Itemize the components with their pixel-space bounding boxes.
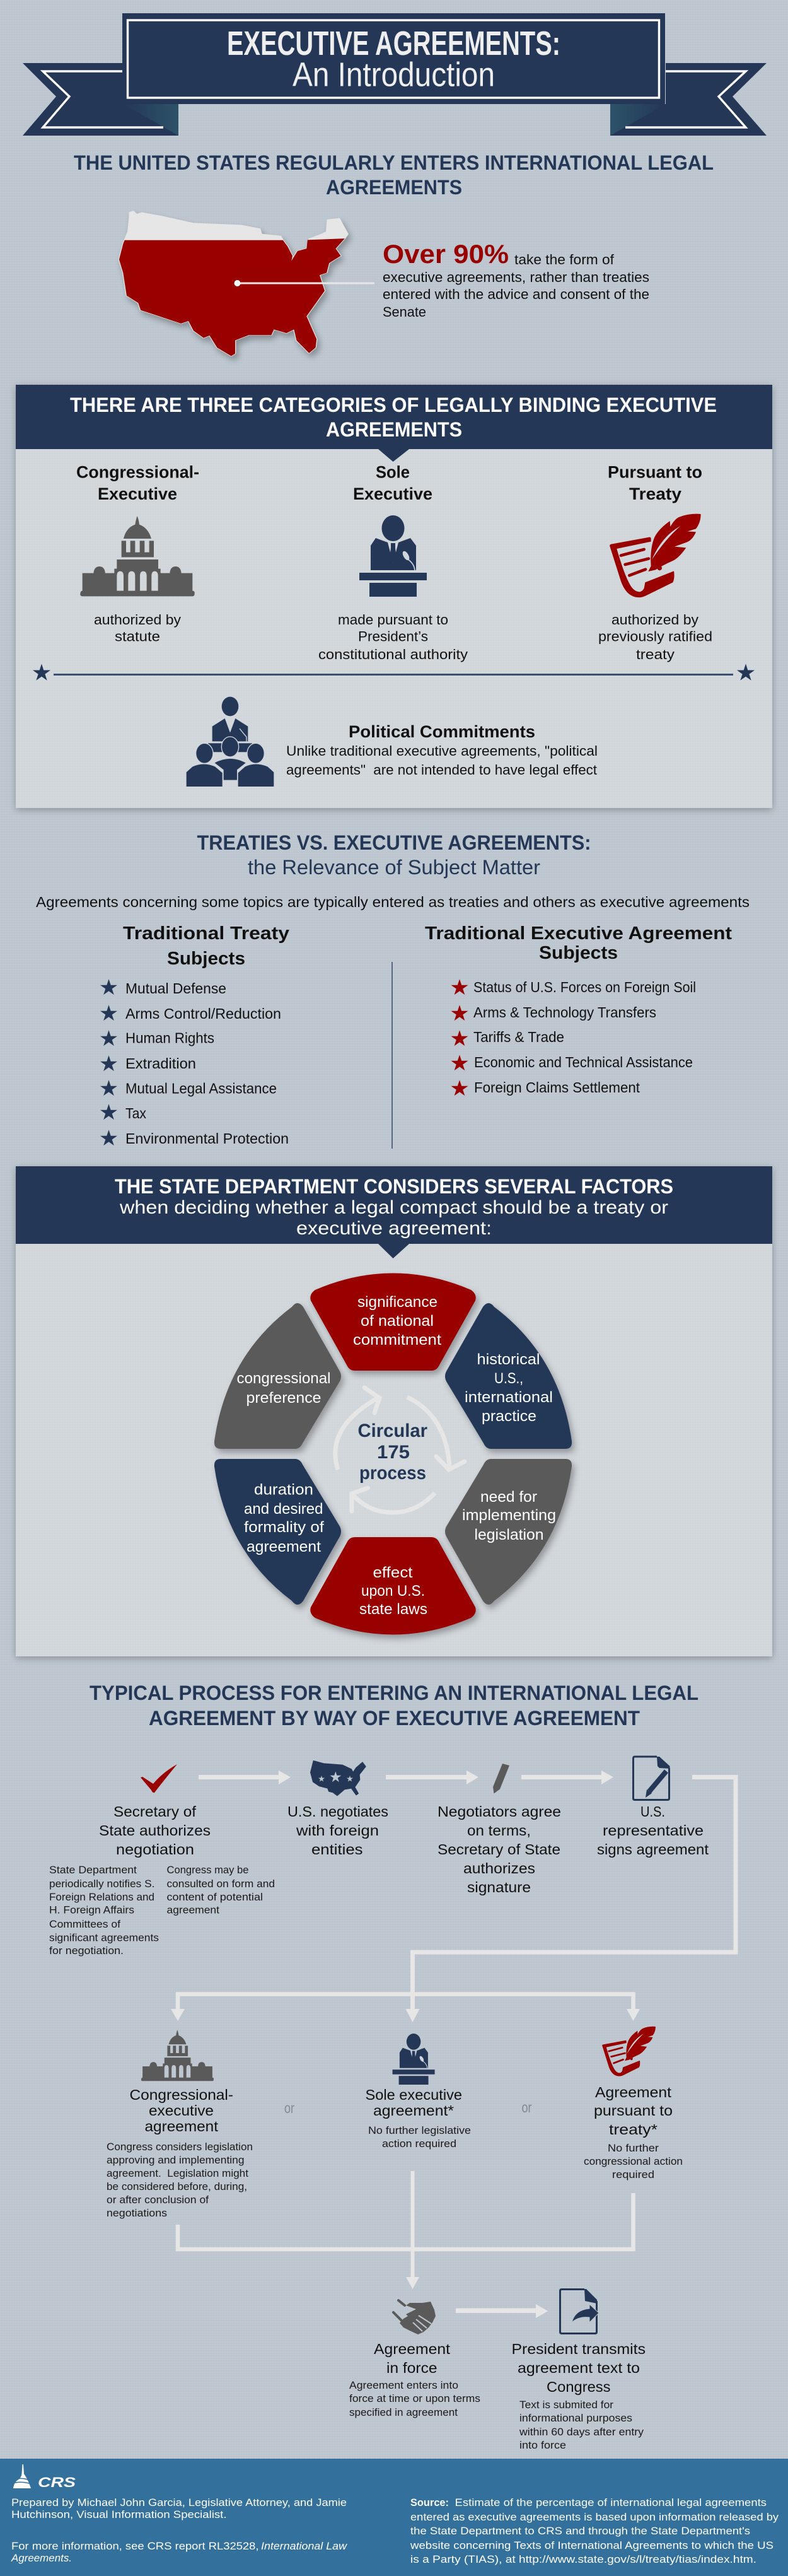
segment label: significance of national commitment (353, 1294, 441, 1349)
callout: over 90 percent: Senate (383, 304, 426, 320)
list: traditional treaty subjects: Mutual Defense (125, 980, 226, 997)
step 1: secretary of state authorizes: Congress may be (166, 1864, 248, 1876)
arrow: step 1 to step 2 (199, 1771, 291, 1784)
icon: document with forward arrow (560, 2289, 599, 2334)
US map with 90 percent fill (119, 211, 348, 356)
segment label: need for implementing legislation (462, 1489, 556, 1543)
list: traditional treaty subjects: Traditional Treaty (123, 923, 289, 944)
text: political commitments: Unlike traditional executive agreements, "political (286, 743, 598, 759)
option: sole executive agreement: Sole executive (366, 2087, 462, 2103)
center label: circular 175 process (358, 1420, 427, 1484)
segment label: effect upon U.S. state laws: effect (373, 1564, 413, 1581)
title ribbon banner (23, 13, 767, 136)
icon: US map with stars (311, 1761, 366, 1796)
option: congressional-executive agreement: approving and implementing (107, 2154, 245, 2166)
option: congressional-executive agreement: be considered before, during, (107, 2181, 247, 2193)
segment label: need for implementing legislation: need for (480, 1489, 537, 1506)
footer source note: Source: (410, 2497, 449, 2509)
category: congressional-executive: Congressional- (76, 463, 199, 482)
step 1: secretary of state authorizes: content of potential (166, 1891, 263, 1903)
panel header: three categories: THERE ARE THREE CATEGORIES OF LEGALLY BINDING EXECUTIVE (70, 394, 717, 416)
segment label: need for implementing legislation: legislation (474, 1526, 543, 1543)
list: traditional executive agreement subjects: Tariffs & Trade (473, 1029, 564, 1045)
footer credits: For more information, see CRS report RL32528, (11, 2541, 258, 2552)
step 1: secretary of state authorizes: consulted on form and (166, 1878, 275, 1890)
list: traditional executive agreement subjects: Status of U.S. Forces on Foreign Soil (473, 979, 696, 995)
heading: typical process: AGREEMENT BY WAY OF EXECUTIVE AGREEMENT (149, 1707, 640, 1730)
option: congressional-executive agreement: agreement. Legislation might (107, 2167, 248, 2179)
list: traditional treaty subjects: Tax (125, 1105, 146, 1121)
segment label: duration and formality: agreement (246, 1538, 321, 1555)
step 4: U.S. representative signs: U.S. (640, 1803, 665, 1820)
footer source note: is a Party (TIAS), at http://www.state.gov/s/l/treaty/tias/index.htm. (410, 2554, 756, 2565)
category: congressional-executive: Executive (98, 484, 177, 503)
category: sole executive: President’s (358, 628, 428, 645)
category: pursuant to treaty: previously ratified (598, 628, 712, 645)
step: agreement in force: force at time or upon terms (349, 2392, 480, 2404)
list: traditional treaty subjects: Environmental Protection (125, 1130, 289, 1147)
segment label: congressional preference (237, 1370, 330, 1407)
map leader line (235, 280, 374, 286)
footer credits: Hutchinson, Visual Information Specialist. (11, 2509, 227, 2520)
segment label: duration and formality: formality of (244, 1519, 324, 1536)
list: traditional executive agreement subjects: Economic and Technical Assistance (474, 1054, 693, 1070)
option: agreement pursuant to treaty: No further (608, 2142, 659, 2154)
step: agreement in force: Agreement (374, 2341, 451, 2357)
category: pursuant to treaty: authorized by (611, 612, 698, 628)
icon: pen (493, 1764, 509, 1794)
panel: state department factors (16, 1166, 772, 1656)
list: traditional executive agreement subjects: Subjects (539, 943, 618, 963)
panel header: three categories (16, 385, 772, 462)
panel header: state department factors: THE STATE DEPARTMENT CONSIDERS SEVERAL FACTORS (115, 1175, 673, 1198)
arrow: flow connector to three agreement types (171, 1777, 736, 2022)
segment label: historical practice (465, 1351, 553, 1425)
callout: over 90 percent: take the form of (514, 252, 615, 267)
category: pursuant to treaty: Treaty (629, 484, 681, 503)
step 1: secretary of state authorizes: for negotiation. (49, 1945, 124, 1957)
option: congressional-executive agreement: negotiations (107, 2207, 167, 2219)
option: agreement pursuant to treaty: Agreement (595, 2084, 672, 2100)
step 1: secretary of state authorizes: State authorizes (99, 1822, 211, 1839)
step: president transmits: Congress (547, 2379, 610, 2395)
option: agreement pursuant to treaty: pursuant to (594, 2102, 673, 2119)
step: president transmits: within 60 days after entry (519, 2426, 644, 2438)
option: sole executive agreement: action required (382, 2138, 456, 2150)
callout: over 90 percent: executive agreements, rather than treaties (383, 269, 649, 285)
step 4: U.S. representative signs: signs agreement (597, 1841, 709, 1858)
step: president transmits (512, 2289, 646, 2451)
title ribbon banner: An Introduction (293, 56, 495, 93)
option: congressional-executive agreement: Congress considers legislation (107, 2141, 253, 2153)
segment label: historical practice: U.S., (494, 1370, 523, 1387)
step 2: U.S. negotiates: U.S. negotiates (287, 1803, 388, 1820)
heading: united states regularly enters: AGREEMENTS (326, 176, 462, 199)
list: traditional treaty subjects: Subjects (167, 949, 245, 969)
step 2: U.S. negotiates (287, 1761, 388, 1858)
category: sole executive: made pursuant to (338, 612, 448, 628)
step 1: secretary of state authorizes: periodically notifies S. (49, 1878, 155, 1890)
step: agreement in force (349, 2300, 480, 2418)
intro sentence: Agreements concerning some topics are typically entered as treaties and others as executive agreements (36, 894, 750, 910)
list: traditional executive agreement subjects (425, 923, 732, 1096)
category: congressional-executive: authorized by (94, 612, 181, 628)
callout: over 90 percent (383, 239, 649, 320)
icon: political commitments group (186, 697, 274, 787)
segment label: effect upon U.S. state laws: state laws (359, 1601, 427, 1618)
segment label: duration and formality: duration (254, 1481, 313, 1499)
option: sole executive agreement: No further legislative (368, 2124, 471, 2136)
callout: over 90 percent: entered with the advice and consent of the (383, 286, 649, 302)
option: sole executive agreement: agreement* (373, 2102, 454, 2119)
list: traditional executive agreement subjects: Arms & Technology Transfers (473, 1004, 656, 1021)
option: congressional-executive agreement: agreement (145, 2118, 219, 2134)
category: sole executive: constitutional authority (318, 647, 468, 662)
step 1: secretary of state authorizes: Secretary of (113, 1803, 197, 1820)
step: agreement in force: in force (386, 2360, 437, 2376)
circular diagram segments (214, 1273, 572, 1635)
category: congressional-executive: statute (115, 628, 160, 645)
step 1: secretary of state authorizes: agreement (166, 1904, 219, 1916)
step 1: secretary of state authorizes: negotiation (116, 1841, 194, 1858)
footer (0, 2459, 788, 2576)
step: president transmits: President transmits (512, 2341, 646, 2357)
option: agreement pursuant to treaty: congressional action (584, 2155, 683, 2167)
option: congressional-executive agreement: Congressional- (130, 2087, 233, 2103)
text: political commitments (286, 722, 598, 778)
step 3: negotiators agree: on terms, (467, 1822, 531, 1839)
footer credits (11, 2497, 347, 2564)
option: agreement pursuant to treaty: treaty* (609, 2121, 658, 2138)
panel header: state department factors: when deciding whether a legal compact should be a treaty or (119, 1197, 668, 1218)
step 4: U.S. representative signs (597, 1757, 709, 1858)
title ribbon banner: EXECUTIVE AGREEMENTS: (227, 25, 560, 62)
footer source note: the State Department to CRS and through the State Department's (410, 2526, 750, 2537)
center label: circular 175 process: 175 (377, 1442, 410, 1463)
step 1: secretary of state authorizes: State Department (49, 1864, 137, 1876)
text: political commitments: agreements" are not intended to have legal effect (286, 762, 597, 778)
heading: typical process (90, 1682, 698, 1730)
option: congressional-executive agreement: or after conclusion of (107, 2194, 209, 2206)
text: political commitments: Political Commitments (349, 722, 535, 741)
callout: over 90 percent: Over 90% (383, 239, 509, 269)
center label: circular 175 process: Circular (358, 1420, 427, 1441)
footer source note: Estimate of the percentage of international legal agreements (455, 2497, 767, 2509)
step: president transmits: into force (519, 2439, 566, 2451)
arrow: merge connector into agreement in force (178, 2171, 633, 2289)
option: sole executive agreement (366, 2034, 471, 2150)
panel header: three categories: AGREEMENTS (326, 418, 462, 441)
step 4: U.S. representative signs: representative (603, 1822, 704, 1839)
step 1: secretary of state authorizes: Committees of (49, 1918, 120, 1930)
category: sole executive (318, 463, 468, 662)
footer credits: Prepared by Michael John Garcia, Legislative Attorney, and Jamie (11, 2497, 347, 2509)
option: congressional-executive agreement (107, 2030, 253, 2219)
icon: document with pen (633, 1757, 669, 1800)
list: traditional treaty subjects: Extradition (125, 1055, 196, 1072)
segment label: significance of national commitment: significance (357, 1294, 437, 1311)
star divider (33, 664, 755, 681)
step 2: U.S. negotiates: with foreign (296, 1822, 379, 1839)
text: or (first): or (284, 2100, 294, 2116)
CRS logo: CRS (38, 2474, 76, 2490)
footer source note: website concerning Texts of International Agreements to which the US (410, 2540, 774, 2551)
category: congressional-executive (76, 463, 199, 645)
step 1: secretary of state authorizes: Foreign Relations and (49, 1891, 154, 1903)
panel header: state department factors: executive agreement: (296, 1218, 492, 1239)
footer credits: International Law (261, 2541, 347, 2552)
category: sole executive: Executive (353, 484, 432, 503)
step: president transmits: agreement text to (518, 2360, 640, 2376)
option: congressional-executive agreement: executive (149, 2102, 214, 2119)
category: pursuant to treaty: treaty (636, 647, 675, 662)
segment label: effect upon U.S. state laws: upon U.S. (361, 1583, 425, 1600)
category: pursuant to treaty (598, 463, 712, 662)
segment label: duration and formality: and desired (244, 1501, 323, 1518)
list: traditional treaty subjects (100, 923, 289, 1147)
step 3: negotiators agree (437, 1764, 561, 1895)
step: president transmits: informational purposes (519, 2412, 632, 2424)
step: agreement in force: Agreement enters into (349, 2379, 458, 2391)
list: traditional executive agreement subjects: Foreign Claims Settlement (474, 1079, 640, 1096)
heading: united states regularly enters: THE UNITED STATES REGULARLY ENTERS INTERNATIONAL LEGAL (74, 151, 714, 174)
segment label: effect upon U.S. state laws (359, 1564, 427, 1618)
segment label: need for implementing legislation: implementing (462, 1507, 556, 1524)
CRS logo (13, 2464, 76, 2490)
heading: treaties vs executive agreements (197, 831, 591, 879)
panel: three categories (16, 385, 772, 808)
option: agreement pursuant to treaty: required (612, 2169, 654, 2181)
list: traditional treaty subjects: Human Rights (125, 1029, 214, 1046)
arrow: step 2 to step 3 (386, 1771, 478, 1784)
list: traditional treaty subjects: Mutual Legal Assistance (125, 1080, 277, 1096)
icon: handshake (393, 2300, 436, 2334)
option: agreement pursuant to treaty (584, 2027, 683, 2181)
segment label: duration and formality (244, 1481, 324, 1555)
segment label: historical practice: international (465, 1389, 553, 1406)
panel header: state department factors (16, 1166, 772, 1258)
center label: circular 175 process: process (359, 1463, 426, 1484)
category: sole executive: Sole (376, 463, 410, 482)
arrow: agreement in force to transmit (456, 2304, 548, 2318)
segment label: historical practice: historical (477, 1351, 540, 1368)
segment label: significance of national commitment: of national (361, 1313, 434, 1330)
list: traditional executive agreement subjects: Traditional Executive Agreement (425, 923, 732, 944)
step: president transmits: Text is submited for (519, 2399, 613, 2411)
segment label: significance of national commitment: commitment (353, 1332, 441, 1349)
heading: treaties vs executive agreements: TREATIES VS. EXECUTIVE AGREEMENTS: (197, 831, 591, 854)
step 3: negotiators agree: signature (467, 1879, 531, 1895)
footer credits: Agreements. (11, 2553, 72, 2564)
segment label: congressional preference: congressional (237, 1370, 330, 1387)
list: traditional treaty subjects: Arms Control/Reduction (125, 1005, 281, 1022)
vertical divider (391, 962, 393, 1149)
step 1: secretary of state authorizes: H. Foreign Affairs (49, 1904, 134, 1916)
heading: united states regularly enters (74, 151, 714, 199)
footer source note: entered as executive agreements is based upon information released by (410, 2512, 779, 2523)
step 3: negotiators agree: authorizes (463, 1860, 535, 1876)
icon: circular arrows (335, 1388, 465, 1513)
heading: treaties vs executive agreements: the Relevance of Subject Matter (248, 856, 540, 879)
step 1: secretary of state authorizes: significant agreements (49, 1931, 159, 1944)
step 1: secretary of state authorizes (49, 1764, 275, 1957)
footer source note (410, 2497, 779, 2565)
step 3: negotiators agree: Negotiators agree (437, 1803, 561, 1820)
step 3: negotiators agree: Secretary of State (437, 1841, 560, 1858)
segment label: congressional preference: preference (246, 1390, 322, 1407)
segment label: historical practice: practice (482, 1408, 536, 1425)
icon: red check mark (141, 1764, 177, 1793)
arrow: step 3 to step 4 (521, 1771, 613, 1784)
category: pursuant to treaty: Pursuant to (608, 463, 702, 482)
step: agreement in force: specified in agreement (349, 2406, 458, 2418)
heading: typical process: TYPICAL PROCESS FOR ENTERING AN INTERNATIONAL LEGAL (90, 1682, 698, 1704)
step 2: U.S. negotiates: entities (311, 1841, 363, 1858)
text: or (second): or (522, 2099, 532, 2116)
